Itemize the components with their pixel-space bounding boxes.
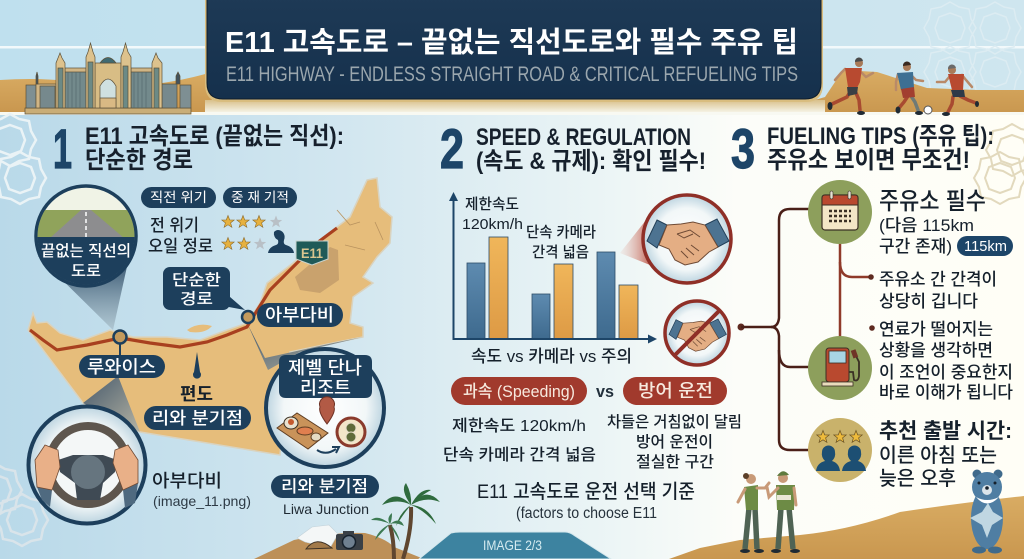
map of UAE xyxy=(28,178,392,455)
heading: section 2: 2 xyxy=(440,117,464,180)
icon: camera xyxy=(336,531,363,550)
text block: running out of fuel: 연료가 떨어지는 xyxy=(879,320,993,339)
callout: Jebel Dhanna resort: 제벨 단나 xyxy=(288,358,362,378)
pill: 루와이스 xyxy=(79,355,165,378)
heading: section 1: 단순한 경로 xyxy=(85,147,193,174)
text block: fuel required xyxy=(879,188,986,256)
rating rows: 오일 정로 xyxy=(148,237,213,256)
caption: steering xyxy=(152,471,251,509)
text block: selection criteria: E11 고속도로 운전 선택 기준 xyxy=(477,481,695,503)
icon: soccer players xyxy=(828,57,979,116)
text block: running out of fuel: 이 조언이 중요한지 xyxy=(879,363,1013,382)
text block: speeding notes xyxy=(443,417,596,464)
callout: simple route xyxy=(163,267,245,310)
text block: defensive notes: 절실한 구간 xyxy=(636,453,714,471)
arrow xyxy=(317,447,339,453)
icon: prohibited handshake xyxy=(665,301,729,365)
caption: steering: 아부다비 xyxy=(152,471,222,491)
text block: running out of fuel: 상황을 생각하면 xyxy=(879,341,993,360)
title banner xyxy=(205,0,823,102)
illustration: two rangers xyxy=(738,471,800,553)
heading: section 1 xyxy=(53,117,344,180)
bar chart: 간격 넓음 xyxy=(532,244,589,261)
pill: 리와 분기점 junction: 리와 분기점 xyxy=(281,477,368,496)
callout: endless straight road xyxy=(36,186,136,287)
text block: running out of fuel: 바로 이해가 됩니다 xyxy=(879,383,1013,402)
rating rows: 전 위기 xyxy=(150,216,199,235)
panel: section 3 fueling tips xyxy=(731,117,1013,490)
text block: running out of fuel xyxy=(879,320,1013,402)
footer tab: image counter: IMAGE 2/3 xyxy=(483,538,542,553)
pill: 리와 분기점 map xyxy=(144,406,251,430)
icon: sushi board xyxy=(277,413,328,449)
text block: selection criteria: (factors to choose E11 xyxy=(516,505,657,522)
pill: defensive driving xyxy=(623,377,727,405)
heading: section 3: 3 xyxy=(731,117,755,180)
pill: 리와 분기점 junction xyxy=(271,475,379,498)
icon: sushi plate xyxy=(337,418,365,446)
pill: 115km: 115km xyxy=(964,239,1007,255)
panel: section 2 speed and regulation xyxy=(440,117,742,522)
bar chart: 120km/h xyxy=(462,216,523,233)
heading: section 3 xyxy=(731,117,994,180)
caption: Liwa Junction: Liwa Junction xyxy=(283,501,369,517)
callout: simple route: 경로 xyxy=(180,290,213,308)
pill: 직전 위기 xyxy=(141,187,216,208)
bar chart: 제한속도 xyxy=(465,196,519,213)
pill: 아부다비: 아부다비 xyxy=(265,305,334,325)
text block: fuel required: (다음 115km xyxy=(879,216,974,235)
heading: section 2: SPEED & REGULATION xyxy=(476,124,691,151)
connector tree xyxy=(738,209,875,450)
icon: handshake xyxy=(620,195,731,283)
bar chart xyxy=(449,192,657,366)
illustration: bear mascot xyxy=(970,470,1003,554)
pill: defensive driving: 방어 운전 xyxy=(638,381,713,401)
icon: fuel pump xyxy=(808,336,872,400)
text block: selection criteria xyxy=(477,481,695,522)
icon: Atlantis palace illustration xyxy=(25,43,191,114)
callout: endless straight road: 끝없는 직선의 xyxy=(41,242,131,260)
text block: gas station spacing: 주유소 간 간격이 xyxy=(879,270,997,289)
heading: section 1: 1 xyxy=(53,117,72,180)
pill: 리와 분기점 map: 리와 분기점 xyxy=(152,409,243,428)
pill: 중재 기적 xyxy=(223,187,297,208)
icon: palm trees xyxy=(371,483,440,559)
pill: speeding xyxy=(451,377,587,405)
heading: section 2 xyxy=(440,117,706,180)
E11 road shield: E11 xyxy=(301,245,323,261)
marker: Abu Dhabi xyxy=(242,311,254,323)
marker: Ruwais xyxy=(114,330,126,356)
text block: recommended departure: 늦은 오후 xyxy=(879,467,956,490)
rating rows xyxy=(148,216,294,256)
text block: recommended departure: 이른 아침 또는 xyxy=(879,444,997,467)
label: 편도: 편도 xyxy=(180,384,213,404)
panel: section 1 route map xyxy=(28,117,392,524)
text block: recommended departure: 추천 출발 시간: xyxy=(879,420,1012,443)
icon: calendar xyxy=(808,180,872,244)
callout: simple route: 단순한 xyxy=(172,271,221,289)
callout: Jebel Dhanna resort: 리조트 xyxy=(300,378,351,398)
text block: speeding notes: 제한속도 120km/h xyxy=(452,417,586,435)
pill: 루와이스: 루와이스 xyxy=(87,357,156,377)
pill: 중재 기적: 중 재 기적 xyxy=(231,190,289,205)
text block: defensive notes: 방어 운전이 xyxy=(636,433,713,451)
pill: speeding: 과속 (Speeding) xyxy=(463,382,575,401)
text block: gas station spacing xyxy=(879,270,997,311)
icon: stars and people xyxy=(808,418,872,482)
icon: steering wheel xyxy=(28,406,146,524)
footer tab: image counter xyxy=(419,532,611,559)
text block: defensive notes: 차들은 거침없이 달림 xyxy=(607,413,742,431)
pin marker xyxy=(193,352,201,379)
E11 road shield xyxy=(296,241,328,265)
icon: location pin xyxy=(320,397,335,424)
bar chart: 속도 vs 카메라 vs 주의 xyxy=(471,347,632,366)
text block: speeding notes: 단속 카메라 간격 넓음 xyxy=(443,446,596,464)
bar chart: 단속 카메라 xyxy=(526,224,596,241)
subtitle: E11 HIGHWAY - ENDLESS STRAIGHT ROAD & CRITICAL REFUELING TIPS xyxy=(226,62,798,86)
caption: steering: (image_11.png) xyxy=(153,493,251,509)
bottom right desert xyxy=(669,496,1024,559)
pill: 아부다비 xyxy=(257,303,343,327)
callout: Jebel Dhanna resort xyxy=(266,349,384,467)
road line xyxy=(30,228,337,350)
heading: section 1: E11 고속도로 (끝없는 직선): xyxy=(85,123,344,150)
text block: gas station spacing: 상당히 깁니다 xyxy=(879,292,978,311)
heading: section 3: 주유소 보이면 무조건! xyxy=(767,147,970,174)
text block: recommended departure xyxy=(879,420,1012,490)
title: E11 고속도로 – 끝없는 직선도로와 필수 주유 팁 xyxy=(225,26,798,59)
text block: fuel required: 주유소 필수 xyxy=(879,188,986,215)
label: vs: vs xyxy=(596,382,614,401)
callout: endless straight road: 도로 xyxy=(71,263,101,280)
text block: defensive notes xyxy=(607,413,742,471)
heading: section 2: (속도 & 규제): 확인 필수! xyxy=(476,148,706,175)
pill: 115km xyxy=(957,236,1013,256)
cone under road callout xyxy=(38,256,128,330)
bottom left desert scene xyxy=(254,483,440,559)
pill: 직전 위기: 직전 위기 xyxy=(150,190,207,205)
text block: fuel required: 구간 존재) xyxy=(879,237,952,256)
